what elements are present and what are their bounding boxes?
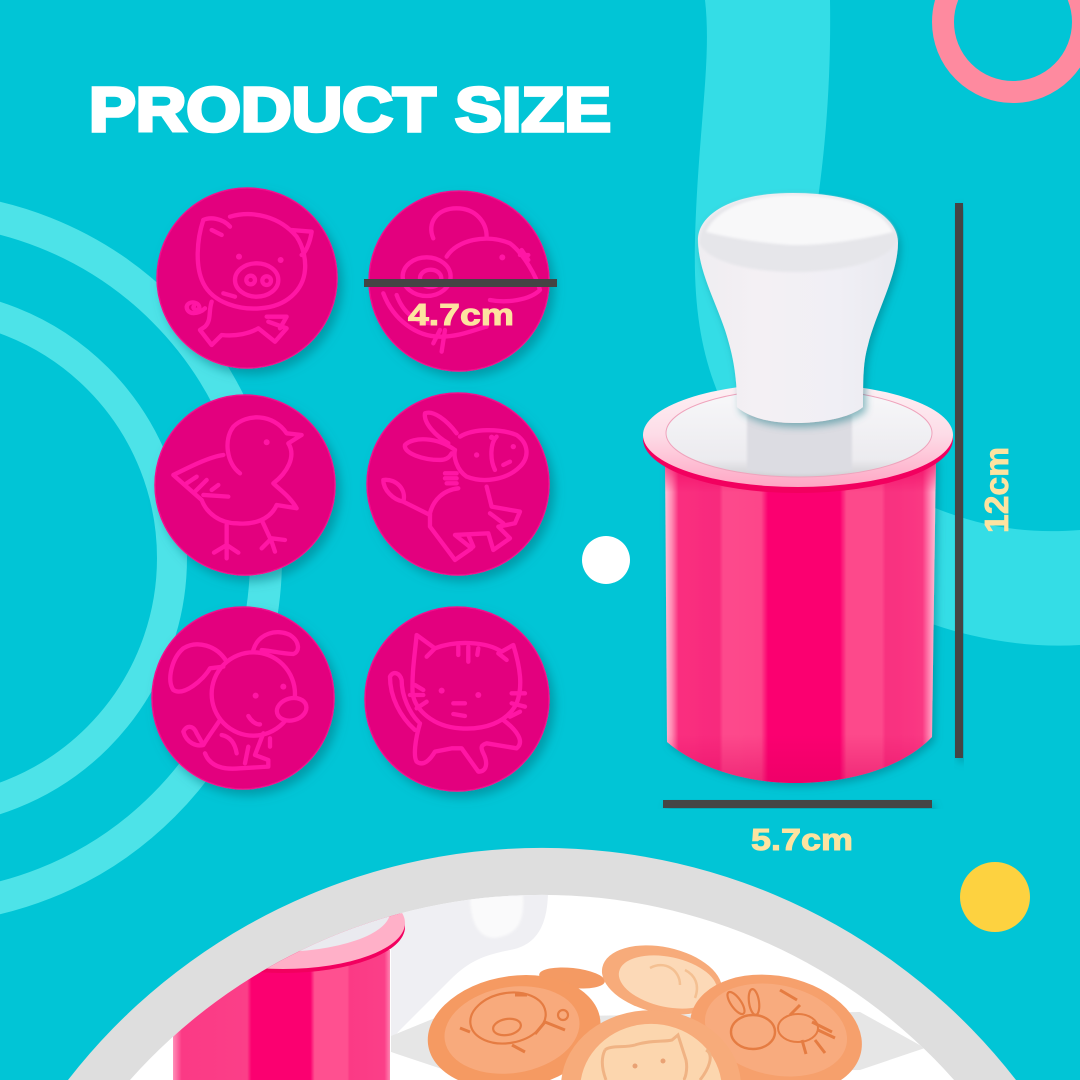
plunger shaft bbox=[747, 415, 852, 474]
reflection bbox=[391, 890, 548, 1040]
coin: mouse bbox=[369, 191, 549, 371]
title: PRODUCT SIZE bbox=[89, 76, 611, 145]
bowl bbox=[391, 1012, 924, 1070]
panel: stamp coins bbox=[152, 188, 549, 791]
handle bbox=[698, 193, 898, 423]
photo bbox=[130, 894, 954, 1080]
dimension: height line bbox=[955, 203, 963, 758]
ring: inner left bbox=[0, 304, 172, 812]
lid bbox=[666, 389, 932, 477]
cookie: donkey bbox=[690, 971, 862, 1080]
coin: chick bbox=[155, 395, 335, 575]
cookie: back bbox=[539, 968, 605, 988]
cup rim bbox=[643, 383, 953, 493]
coin: cat bbox=[365, 607, 549, 791]
dot: yellow bbox=[960, 862, 1030, 932]
photo cup bbox=[173, 913, 405, 1080]
ring: outer left bbox=[0, 208, 266, 908]
product: stamp press bbox=[643, 193, 953, 783]
dimension: width label: 5.7cm bbox=[751, 822, 853, 857]
panel: cookie photo arch bbox=[68, 848, 1016, 1080]
dimension: width line bbox=[663, 800, 932, 808]
wave band bbox=[695, 0, 1080, 646]
ring: top right pink bbox=[943, 0, 1080, 92]
arch frame bbox=[68, 848, 1016, 1080]
dimension: coin line bbox=[364, 279, 557, 287]
dimension: coin label: 4.7cm bbox=[408, 297, 514, 332]
coin: donkey bbox=[367, 393, 549, 575]
cookie: pig bbox=[428, 975, 601, 1080]
dot: white bbox=[582, 536, 630, 584]
dimension: height label: 12cm bbox=[978, 447, 1015, 533]
cookie: cat bbox=[561, 1010, 741, 1080]
coin: pig bbox=[157, 188, 337, 368]
coin: dog bbox=[152, 607, 334, 789]
cup body bbox=[665, 455, 936, 783]
cookie: butterfly bbox=[602, 945, 721, 1014]
